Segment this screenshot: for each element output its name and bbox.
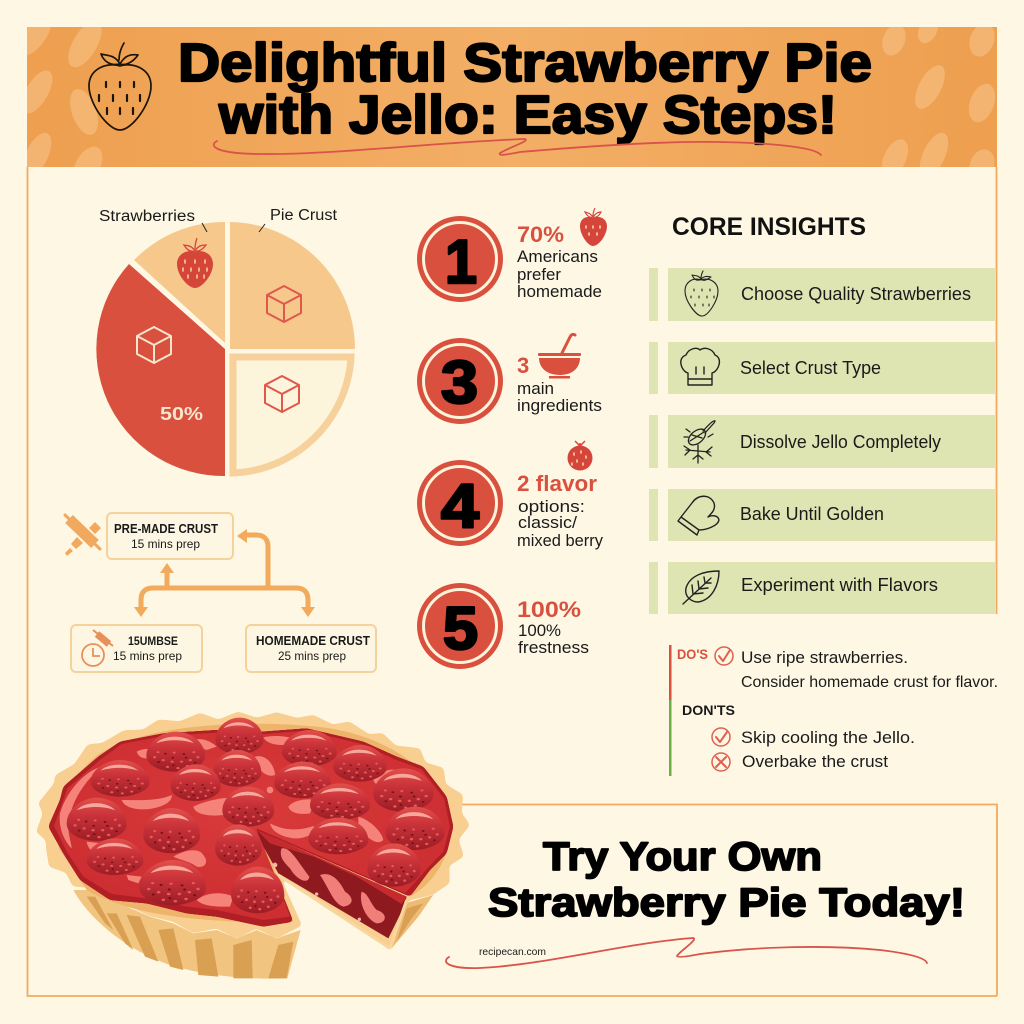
icon: leaf [683,571,719,604]
call to action box: Strawberry Pie Today! [488,881,965,925]
do's heading: DO'S [677,647,708,662]
icon: rolling pin [65,515,101,556]
icon: whisk and snowflake [684,421,715,463]
badge: 1 [417,216,503,302]
label: 50%: 50% [160,403,203,424]
badge: 5: 5 [443,595,478,662]
do's and don'ts panel [669,645,998,776]
stat: 2 flavor options: 2 flavor [517,471,597,496]
inner rim shadow [56,724,451,922]
title: Delightful Strawberry Pie [178,33,872,93]
icon: oven mitt [678,496,719,535]
segment: strawberries [134,222,225,343]
box: pre-made crust [107,513,233,559]
footer squiggle [446,938,927,968]
don'ts heading: DON'TS [682,702,735,718]
insight: choose quality strawberries [649,268,996,321]
box: homemade crust [246,625,376,672]
page frame [28,167,997,996]
insight: bake until golden: Bake Until Golden [740,504,884,524]
icon: strawberry in segment [177,238,213,288]
glaze highlights [60,736,395,907]
title: with Jello: Easy Steps! [218,85,837,145]
stat: 3 main ingredients: 3 [517,353,529,378]
segment: pie crust [230,222,355,349]
cut face [257,830,407,948]
box: pre-made crust: 15 mins prep [131,537,200,551]
pie label: pie crust [259,207,338,232]
icon: cube on red [137,327,171,363]
crust side [73,890,301,979]
insight: dissolve jello completely [649,415,996,468]
filling edge [48,728,453,927]
crust rim [37,713,469,948]
do's and don'ts panel: Overbake the crust [742,752,888,771]
call to action box: Try Your Own [543,835,822,879]
header banner [27,27,997,167]
icon: header strawberry [89,43,151,130]
icon: chef hat [681,348,719,385]
stat: 2 flavor options [417,441,604,550]
icon: clock with pin [82,630,113,666]
badge: 4 [417,460,503,546]
stat: 100% freshness [417,583,589,669]
stat: 2 flavor options: mixed berry [517,532,604,550]
box: pre-made crust: PRE-MADE CRUST [114,522,218,536]
badge: 4: 4 [441,472,480,541]
illustration: strawberry pie [37,713,469,979]
stat: 100% freshness: frestness [518,639,589,657]
arrows [134,529,315,617]
jam surface [54,731,450,920]
badge: 3 [417,338,503,424]
pie label: strawberries [99,208,207,232]
icon: strawberry outline [685,271,718,316]
pie label: pie crust: Pie Crust [270,207,338,224]
icon: red strawberry [580,208,607,246]
stat: 100% freshness: 100% [518,622,561,640]
pie chart: ingredients [96,222,355,476]
segment: 50 percent [96,264,225,476]
stat: 70% prefer homemade: Americans [517,248,598,266]
insight: dissolve jello completely: Dissolve Jello Completely [740,432,941,452]
icon: cube on cream [265,376,299,412]
icon: round berry [568,441,592,470]
badge: 3: 3 [441,349,478,416]
box: homemade crust: HOMEMADE CRUST [256,634,370,648]
header squiggle underline [214,139,821,155]
icon: don't check [712,728,730,746]
pie label: strawberries: Strawberries [99,208,195,225]
segment: cream [233,357,351,473]
stat: 70% prefer homemade: prefer [517,266,562,284]
stat: 70% prefer homemade: 70% [517,222,564,247]
strawberries [67,718,444,913]
heading: core insights: CORE INSIGHTS [672,213,866,241]
insight: experiment with flavors [649,562,996,614]
stat: 3 main ingredients: main [517,380,554,398]
insight: bake until golden [649,489,996,541]
title [178,33,872,145]
box: garbled crust option: 15 mins prep [113,649,182,663]
do's and don'ts panel: Skip cooling the Jello. [741,728,915,747]
insight: select crust type [649,342,996,394]
stat: 70% prefer homemade: homemade [517,283,602,301]
insight: select crust type: Select Crust Type [740,358,881,378]
stat: 3 main ingredients: ingredients [517,397,602,415]
badge: 5 [417,583,503,669]
stat: 70% prefer homemade [417,208,607,302]
icon: don't cross [712,753,730,771]
icon: do check [715,647,733,665]
source credit: recipecan.com [479,946,546,958]
flowchart: crust options [65,513,376,672]
insight: choose quality strawberries: Choose Quality Strawberries [741,284,971,304]
stat: 3 main ingredients [417,334,602,424]
insight: experiment with flavors: Experiment with Flavors [741,575,938,595]
stat: 2 flavor options: options: [518,498,585,516]
stat: 100% freshness: 100% [517,597,581,622]
box: garbled crust option: 15UMBSE [128,634,178,648]
stat: 2 flavor options: classic/ [518,514,577,532]
icon: mixing bowl [538,334,581,378]
box: garbled crust option [71,625,202,672]
do's and don'ts panel: Use ripe strawberries. [741,648,908,667]
badge: 1: 1 [445,228,477,297]
call to action box [446,804,997,996]
do's and don'ts panel: Consider homemade crust for flavor. [741,674,998,691]
box: homemade crust: 25 mins prep [278,649,346,663]
icon: cube on crust [267,286,301,322]
